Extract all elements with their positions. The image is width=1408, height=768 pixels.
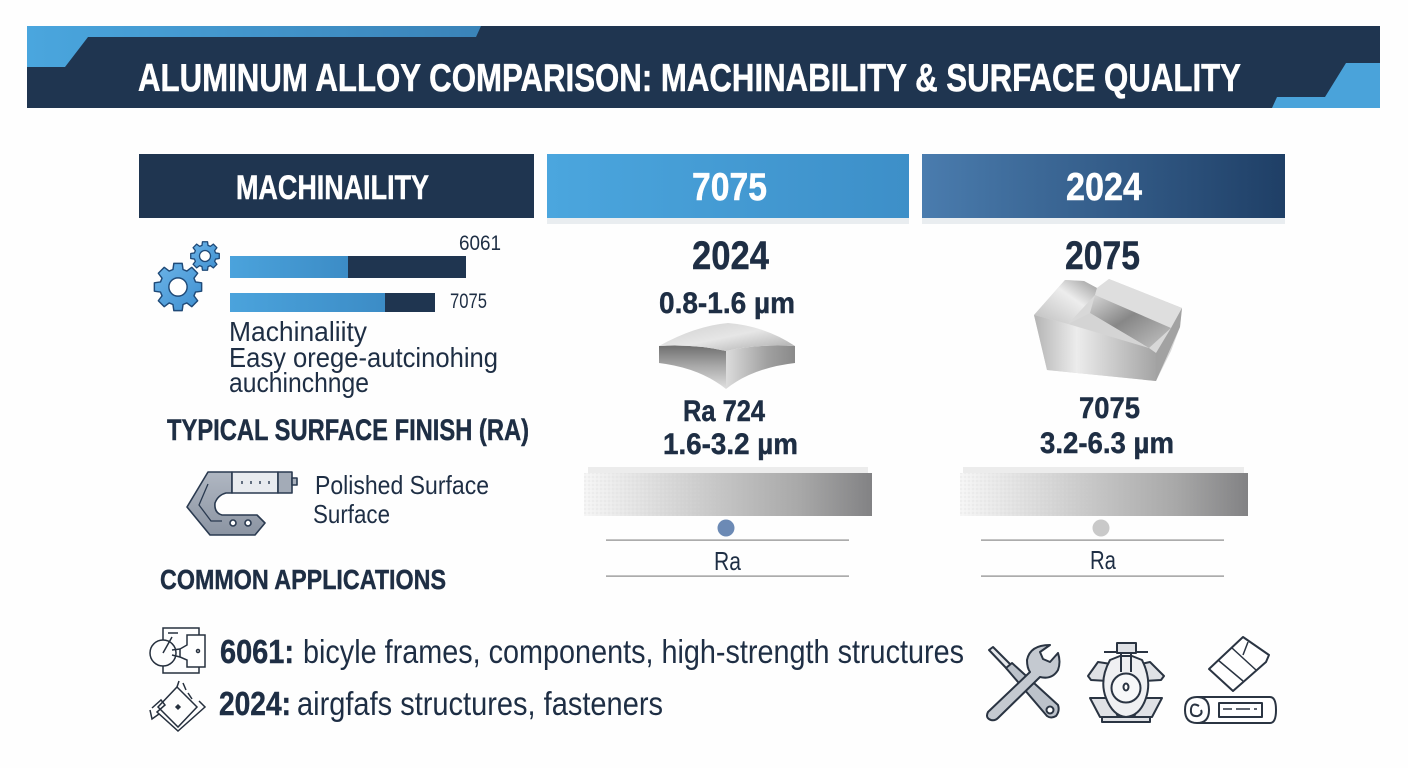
- surface label: Polished Surface: [315, 470, 489, 500]
- surface label: [313, 470, 489, 529]
- column header: machinability: MACHINAILITY: [236, 169, 429, 207]
- surface label: Surface: [313, 499, 390, 529]
- icon: wrench and screwdriver: [987, 645, 1060, 720]
- finish range 0.8-1.6: 0.8-1.6 µm: [659, 287, 795, 320]
- panel: right column: [960, 234, 1248, 577]
- alloy label 2075: 2075: [1065, 234, 1140, 278]
- surface swatch: [584, 467, 872, 516]
- marker dot: [718, 520, 734, 536]
- bar chart: machinability: [230, 232, 501, 313]
- machinability description: [229, 316, 498, 398]
- application text: 6061: bicyle frames, components, high-strength structures: [303, 633, 964, 670]
- application text: 2024: airgfafs structures, fasteners: [297, 685, 663, 722]
- icon: engine: [1088, 643, 1164, 722]
- heading: typical surface finish: TYPICAL SURFACE FINISH (RA): [167, 414, 529, 447]
- machinability description: auchinchnge: [229, 367, 369, 398]
- column header: 2024: [922, 154, 1285, 224]
- column header: machinability: [139, 154, 534, 218]
- finish range 1.6-3.2: 1.6-3.2 µm: [663, 428, 798, 461]
- column header: 7075: [547, 154, 909, 224]
- icon: gears: [154, 242, 219, 311]
- metal sample: curved: [659, 323, 795, 389]
- bar chart: machinability: 6061: [459, 232, 501, 255]
- heading: common applications: COMMON APPLICATIONS: [160, 564, 446, 595]
- column header: 2024: 2024: [1066, 166, 1142, 209]
- column header: 7075: 7075: [692, 166, 767, 209]
- title banner: [27, 26, 1380, 108]
- label Ra 724: Ra 724: [683, 395, 765, 428]
- Ra scale: Ra: [1090, 545, 1116, 575]
- application text: 2024: 2024:: [219, 685, 291, 722]
- panel: middle column: [584, 234, 872, 577]
- icon: fastener and rolled plan: [1185, 637, 1276, 723]
- finish range 3.2-6.3: 3.2-6.3 µm: [1040, 427, 1174, 460]
- icon: bicycle frame: [150, 628, 205, 673]
- bar chart: machinability: 7075: [450, 290, 487, 313]
- machinability description: Machinaliity: [229, 316, 367, 347]
- label 7075: 7075: [1079, 392, 1140, 425]
- metal sample: block: [1034, 279, 1182, 381]
- icon: micrometer: [187, 472, 297, 535]
- Ra scale: Ra: [714, 546, 741, 576]
- surface swatch: [960, 467, 1248, 516]
- application text: 6061: 6061:: [220, 633, 294, 670]
- icon: aircraft part: [150, 681, 205, 731]
- alloy label 2024: 2024: [692, 234, 770, 278]
- marker dot: [1092, 520, 1110, 536]
- machinability description: Easy orege-autcinohing: [229, 342, 498, 373]
